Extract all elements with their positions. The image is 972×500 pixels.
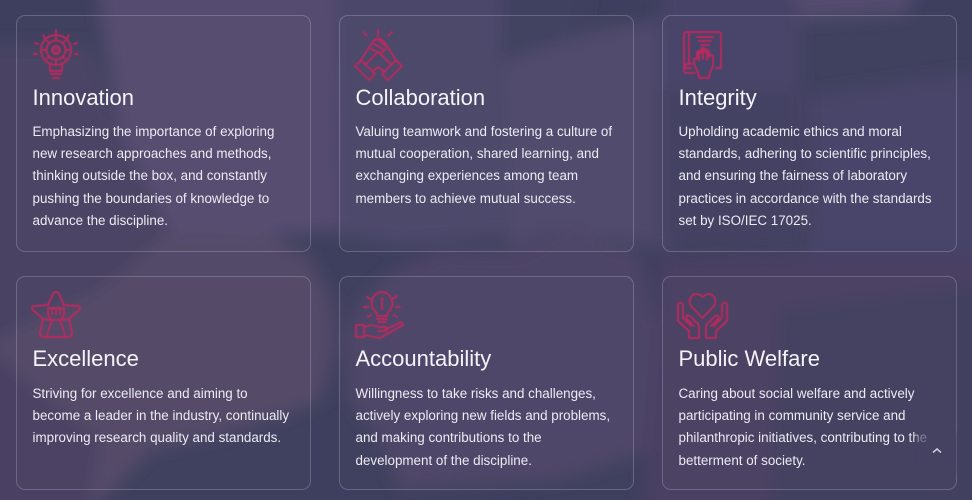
text: Innovation description: new research approaches and methods,	[32, 146, 271, 161]
panel: Public Welfare	[662, 276, 957, 490]
panel: Accountability	[338, 276, 634, 490]
back to top button	[916, 432, 958, 474]
icon: up chevron	[932, 448, 942, 453]
text: Excellence description: improving research quality and standards.	[32, 430, 281, 445]
text: Public Welfare description: philanthropic initiatives, contributing to the	[678, 430, 927, 445]
panel: Integrity	[662, 15, 957, 252]
text: Accountability description	[356, 386, 610, 468]
heading: Innovation: Innovation	[32, 85, 134, 110]
text: Collaboration description: members to achieve mutual success.	[356, 191, 576, 206]
text: Excellence description: become a leader in the industry, continually	[32, 408, 289, 423]
icon: light bulb over open hand	[354, 290, 405, 340]
text: Collaboration description: Valuing teamwork and fostering a culture of	[356, 124, 612, 139]
text: Integrity description: set by ISO/IEC 17025.	[678, 213, 812, 228]
heading: Public Welfare: Public Welfare	[678, 346, 820, 371]
text: Accountability description: actively exploring new fields and problems,	[356, 408, 610, 423]
heading: Integrity: Integrity	[678, 85, 757, 110]
text: Integrity description: practices in accordance with the standards	[678, 191, 932, 206]
panel: Collaboration	[338, 15, 634, 252]
text: Innovation description	[32, 124, 274, 228]
text: Accountability description: Willingness to take risks and challenges,	[356, 386, 596, 401]
text: Public Welfare description	[678, 386, 927, 468]
icon: hand on book	[682, 30, 722, 80]
text: Public Welfare description: betterment of society.	[678, 453, 806, 468]
icon: high five hands	[354, 28, 404, 82]
icon: star with fist	[30, 290, 82, 339]
heading: Accountability: Accountability	[356, 346, 491, 371]
text: Accountability description: development of the discipline.	[356, 453, 532, 468]
text: Integrity description	[678, 124, 932, 228]
text: Innovation description: Emphasizing the importance of exploring	[32, 124, 274, 139]
text: Innovation description: thinking outside the box, and constantly	[32, 168, 267, 183]
text: Innovation description: advance the discipline.	[32, 213, 168, 228]
icon: light bulb with gear	[32, 28, 80, 80]
heading: Collaboration: Collaboration	[356, 85, 485, 110]
text: Collaboration description: mutual cooperation, shared learning, and	[356, 146, 599, 161]
text: Accountability description: and making contributions to the	[356, 430, 542, 445]
text: Integrity description: Upholding academic ethics and moral	[678, 124, 902, 139]
text: Collaboration description	[356, 124, 612, 206]
text: Excellence description: Striving for excellence and aiming to	[32, 386, 248, 401]
text: Collaboration description: exchanging experiences among team	[356, 168, 578, 183]
icon: heart held by two hands	[676, 292, 728, 340]
text: Excellence description	[32, 386, 289, 445]
text: Integrity description: and ensuring the fairness of laboratory	[678, 168, 907, 183]
text: Integrity description: standards, adhering to scientific principles,	[678, 146, 931, 161]
text: Innovation description: pushing the boundaries of knowledge to	[32, 191, 269, 206]
heading: Excellence: Excellence	[32, 346, 139, 371]
panel: Innovation	[16, 15, 311, 252]
text: Public Welfare description: participating in community service and	[678, 408, 906, 423]
panel: Excellence	[16, 276, 311, 490]
text: Public Welfare description: Caring about social welfare and actively	[678, 386, 914, 401]
